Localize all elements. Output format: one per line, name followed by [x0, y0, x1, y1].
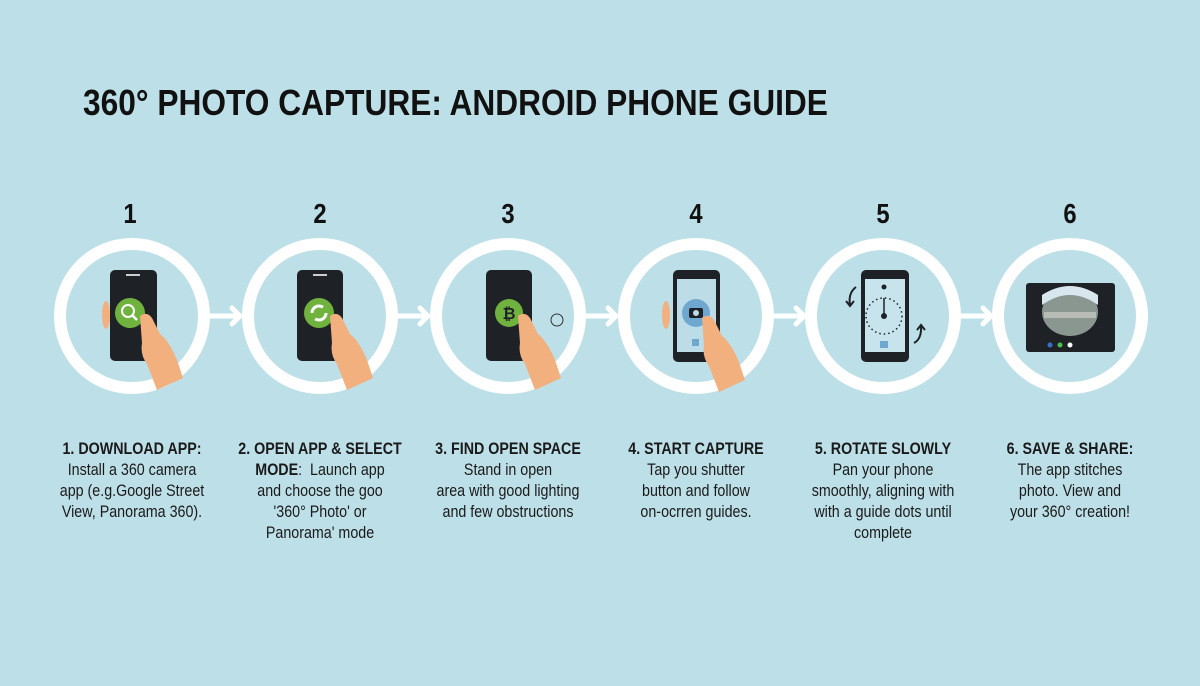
icon: phone 5 rotate: [846, 270, 925, 362]
caption 3: [435, 439, 581, 521]
caption 5: [812, 439, 954, 542]
caption 6: your 360° creation!: [1010, 502, 1130, 521]
caption 1: View, Panorama 360).: [62, 502, 202, 521]
caption 1: app (e.g.Google Street: [60, 481, 204, 500]
caption 5: complete: [854, 523, 912, 542]
icon: phone 4 camera: [662, 270, 745, 392]
caption 2: '360° Photo' or: [274, 502, 366, 521]
step number 4: 4: [689, 198, 703, 229]
title: 360° PHOTO CAPTURE: ANDROID PHONE GUIDE: [83, 82, 828, 123]
caption 1: 1. DOWNLOAD APP:: [62, 439, 202, 458]
caption 3: Stand in open: [464, 460, 552, 479]
caption 5: Pan your phone: [833, 460, 933, 479]
caption 4: on-ocrren guides.: [640, 502, 752, 521]
icon: phone 3: [486, 270, 563, 390]
caption 2: and choose the goo: [257, 481, 383, 500]
caption 6: photo. View and: [1019, 481, 1121, 500]
step number 1: 1: [123, 198, 137, 229]
caption 4: 4. START CAPTURE: [628, 439, 764, 458]
caption 5: with a guide dots until: [814, 502, 952, 521]
caption 6: 6. SAVE & SHARE:: [1007, 439, 1133, 458]
caption 3: and few obstructions: [443, 502, 573, 521]
caption 2: MODE: Launch app: [255, 460, 385, 479]
caption 2: 2. OPEN APP & SELECT: [238, 439, 402, 458]
caption 1: Install a 360 camera: [68, 460, 196, 479]
step number 2: 2: [313, 198, 327, 229]
caption 2: Panorama' mode: [266, 523, 374, 542]
caption 4: Tap you shutter: [647, 460, 745, 479]
icon: phone 3: ₿: [502, 305, 516, 323]
step number 5: 5: [876, 198, 890, 229]
caption 4: [628, 439, 764, 521]
caption 2: [238, 439, 402, 542]
step number 3: 3: [501, 198, 515, 229]
caption 1: [60, 439, 204, 521]
icon: phone 1 search: [102, 270, 183, 390]
caption 6: [1007, 439, 1133, 521]
icon: tablet panorama: [1026, 283, 1115, 352]
caption 5: 5. ROTATE SLOWLY: [815, 439, 951, 458]
arrows: [210, 308, 991, 324]
caption 5: smoothly, aligning with: [812, 481, 954, 500]
step number 6: 6: [1063, 198, 1077, 229]
caption 6: The app stitches: [1018, 460, 1122, 479]
caption 4: button and follow: [642, 481, 750, 500]
circles: [60, 244, 1142, 388]
caption 3: 3. FIND OPEN SPACE: [435, 439, 581, 458]
caption 3: area with good lighting: [437, 481, 579, 500]
icon: phone 2 refresh: [297, 270, 373, 390]
